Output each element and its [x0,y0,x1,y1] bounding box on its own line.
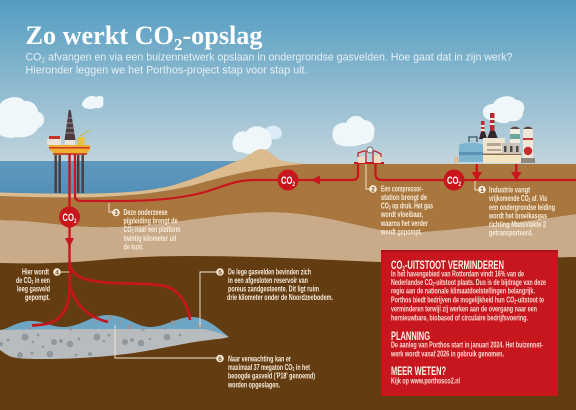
label 2: op druk. Het gas [391,202,433,210]
panel: info box [381,250,558,396]
label 6 [216,354,315,390]
label 3: CO [124,225,136,234]
body: CO2 reduction: -uitstoot te [516,296,544,304]
label 3: Deze onderzeese [124,208,168,217]
smoke stacks [481,121,484,136]
CO2 badge pipeline: 2 [292,181,295,188]
label 6: Naar verwachting kan er [228,354,291,364]
label 4: 4 [55,269,59,276]
label 2: Een compressor- [381,184,423,194]
derrick [64,110,76,140]
label 3 [112,208,180,252]
label 4: leeg gasveld [17,284,50,294]
body: CO2 reduction [391,270,546,322]
intro text: afvangen en via een buizennetwerk opslaan in ondergrondse gasvelden. Hoe gaat dat in zijn werk? [45,52,513,64]
body: CO2 reduction: 2 [514,300,516,306]
platform legs [54,153,84,193]
arrow: industry down 2 [511,164,522,181]
storage tank [459,143,483,162]
label 2: 2 [371,186,375,193]
leaders [57,164,480,358]
label 5: De lege gasvelden bevinden zich [228,268,311,276]
body: planning [390,340,543,358]
title: -opslag [182,21,262,50]
intro text: 2 [41,58,45,64]
label 1: getransporteerd. [489,228,533,238]
label 2: wordt gepompt. [380,228,422,236]
CO2 badge platform [59,206,80,228]
sand seabed and hill [0,149,305,197]
derrick lattice [66,118,74,133]
CO2 badge industry: 2 [458,181,461,188]
body: more info: Kijk op www.porthosco2.nl [391,376,460,386]
arrow: industry down 1 [472,164,482,181]
clouds [0,96,524,154]
pipeline: shore to platform [75,154,358,201]
CO2 badge pipeline [278,170,298,190]
ground: tan layer [0,212,576,263]
body: CO2 reduction: Nederlandse CO [391,278,453,287]
label 3: 3 [114,210,118,217]
silo red [523,129,533,159]
label 1: vrijkomende CO [489,194,550,203]
label 4: Hier wordt [22,268,49,276]
label 2 [369,184,433,236]
ground: brown layer [0,164,576,233]
CO2 badge platform: CO [62,212,79,224]
label 4 [16,268,61,302]
label 5 [216,268,333,302]
label 1: Industrie vangt [489,186,530,194]
label 4: 2 [31,280,33,286]
label 6: 2 [293,367,295,373]
label 2: CO [381,202,393,210]
factory [454,113,535,163]
title: 2 [174,35,182,54]
label 3: de kust. [124,242,144,252]
pipeline: well branches [32,262,190,326]
heading: more info: MEER WETEN? [391,364,446,378]
CO2 badge platform: 2 [74,218,77,225]
arrow: down at platform [65,238,74,247]
label 2: 2 [389,206,391,212]
label 6: worden opgeslagen. [227,380,280,390]
heading: CO2 reduction: 2 [402,266,405,273]
label 5: 5 [218,269,222,276]
arrow: left [311,176,320,184]
intro text: Hieronder leggen we het Porthos-project stap voor stap uit. [26,64,308,76]
ground: dark deep layer [0,250,576,410]
label 2: waarna het verder [380,219,428,228]
body: CO2 reduction: Porthos biedt bedrijven de mogelijkheid hun CO [391,296,574,304]
CO2 badge industry [444,170,464,190]
label 3: pijpleiding brengt de [124,216,178,226]
label 6: 6 [218,356,222,363]
label 1 [478,186,555,238]
label 1: wordt het broeikasgas [488,212,547,220]
silo green [510,129,520,143]
label 1: 1 [480,187,484,194]
CO2 badge pipeline: CO [281,175,298,187]
label 5: poreus zandgesteente. Dit ligt ruim [228,284,319,294]
label 4: in een [33,276,50,285]
label 5: drie kilometer onder de Noordzeebodem. [227,293,333,302]
main building [483,138,505,155]
title: Zo werkt CO [26,21,173,50]
deck buildings [47,139,61,145]
label 5: in een afgesloten reservoir van [228,276,308,285]
label 2: wordt vloeibaar, [380,210,423,219]
pipeline: down to gas field [68,154,71,284]
heading: CO2 reduction: -UITSTOOT VERMINDEREN [405,258,504,272]
body: CO2 reduction: 2 [433,282,435,288]
pipeline: industry to compressor [376,163,576,180]
label 3: 2 [132,229,134,235]
label 1: 2 [529,198,531,204]
label 1: af. Via [530,194,547,203]
label 1: richting Maasvlakte 2 [489,220,546,229]
label 6: beoogde gasveld ('P18' genoemd) [228,372,315,380]
label 6: maximaal 37 megaton CO [228,363,325,372]
heading: CO2 reduction: CO [391,258,409,272]
side building [502,143,520,154]
body: planning: werk wordt vanaf 2026 in gebruik genomen. [390,350,504,358]
reservoir: blue gas layer [0,315,229,340]
label 4: de CO [16,276,40,285]
label 3: twintig kilometer uit [124,234,177,243]
heading: planning: PLANNING [391,329,430,343]
oil platform [47,110,90,193]
intro text [26,52,512,76]
label 2: station brengt de [381,193,427,202]
deck hull [49,145,90,154]
reservoir: pores [0,316,214,358]
intro text: CO [26,52,42,64]
compressor station [354,147,384,164]
reservoir: grey sandstone [0,329,229,359]
label 6: in het [294,363,310,372]
sea [0,161,250,201]
CO2 badge industry: CO [447,175,464,187]
label 3: naar een platform [134,225,180,234]
sky [0,0,576,165]
label 4: gepompt. [25,293,50,302]
